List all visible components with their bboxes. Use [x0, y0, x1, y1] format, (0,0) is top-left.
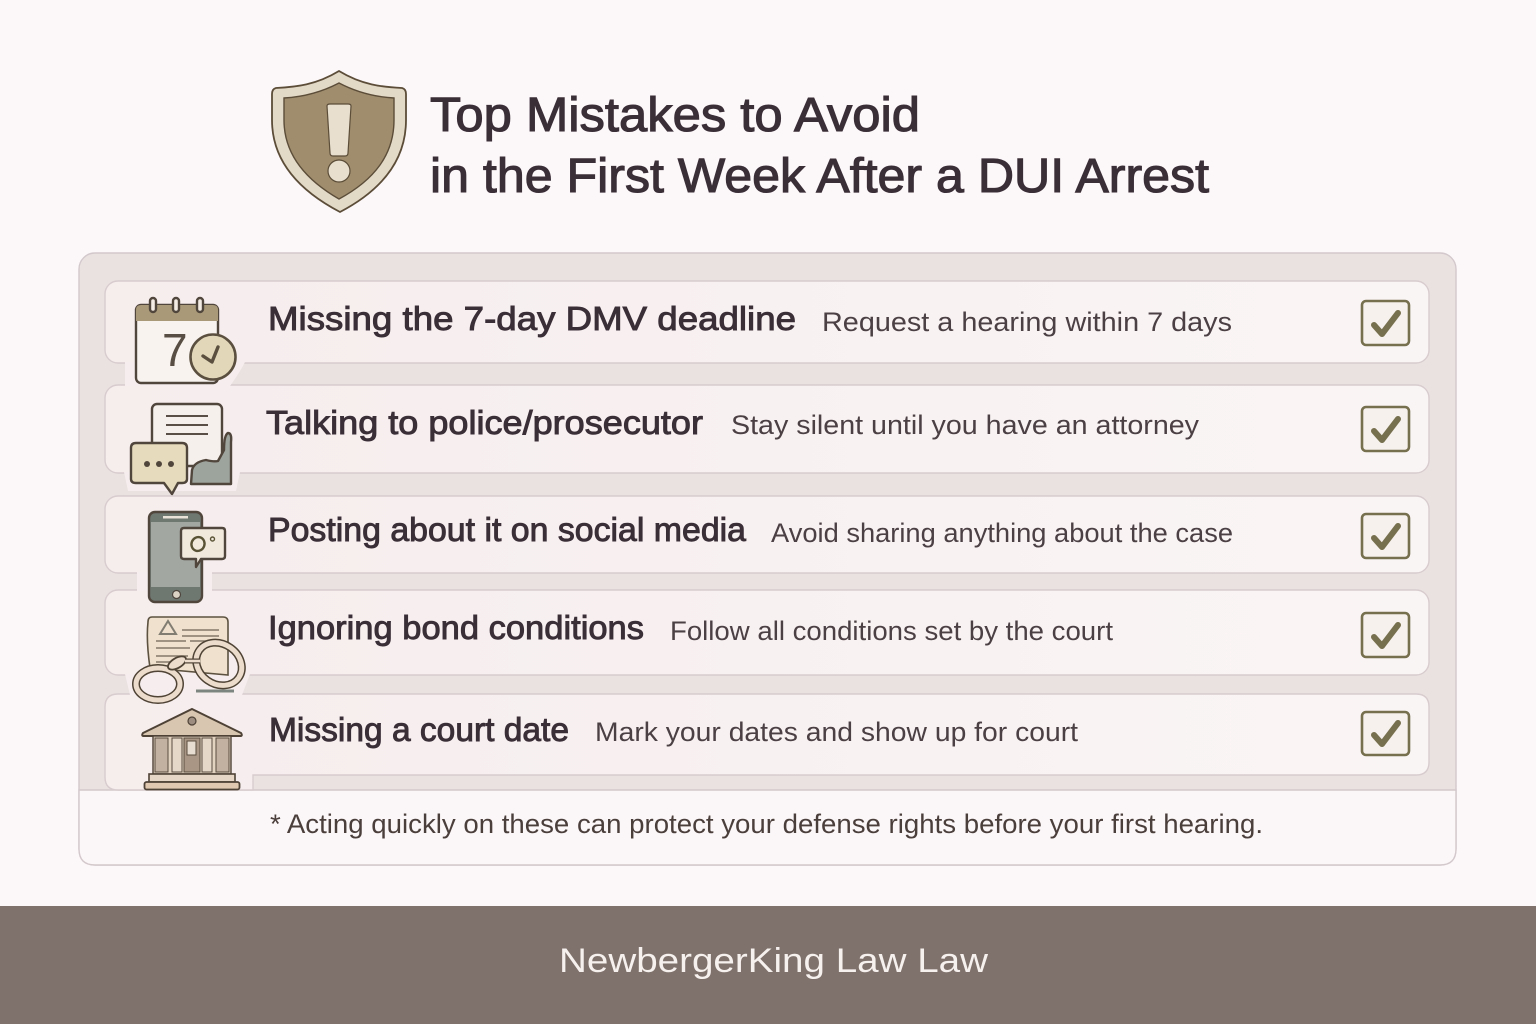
row 5: court date — [105, 694, 1429, 790]
icon: calendar with clock: 7 — [162, 324, 188, 376]
icon: phone with comment bubble — [137, 512, 225, 602]
row 3: social media — [105, 496, 1429, 573]
footnote panel — [79, 790, 1456, 865]
heading: Posting about it on social media — [268, 511, 747, 548]
panel: mistakes checklist — [79, 253, 1456, 865]
checkbox — [1362, 514, 1409, 558]
icon: warning shield — [272, 71, 406, 212]
description: Stay silent until you have an attorney — [731, 410, 1200, 440]
icon: speech bubbles and hand — [124, 404, 240, 494]
title: Top Mistakes to Avoid — [430, 89, 920, 142]
icon: document and handcuffs — [125, 617, 250, 700]
title — [430, 89, 1209, 203]
title: in the First Week After a DUI Arrest — [430, 150, 1209, 203]
icon: courthouse — [142, 709, 242, 790]
footer band — [0, 906, 1536, 1024]
row 1: DMV deadline — [105, 281, 1429, 363]
heading: Missing a court date — [269, 711, 569, 748]
description: Follow all conditions set by the court — [670, 616, 1114, 646]
heading: Missing the 7-day DMV deadline — [268, 300, 796, 337]
checkbox — [1362, 407, 1409, 451]
checkbox — [1362, 712, 1409, 755]
checkbox — [1362, 613, 1409, 657]
heading: Talking to police/prosecutor — [266, 404, 703, 441]
heading: Ignoring bond conditions — [268, 609, 644, 646]
row 2: police/prosecutor — [105, 385, 1429, 473]
row 4: bond conditions — [105, 590, 1429, 675]
footer brand name: NewbergerKing Law Law — [559, 942, 989, 980]
description: Request a hearing within 7 days — [822, 307, 1232, 337]
icon: calendar with clock — [125, 298, 245, 386]
checkbox — [1362, 301, 1409, 345]
description: Avoid sharing anything about the case — [771, 518, 1233, 548]
footnote panel: * Acting quickly on these can protect your defense rights before your first hearing. — [270, 809, 1263, 839]
description: Mark your dates and show up for court — [595, 717, 1079, 747]
